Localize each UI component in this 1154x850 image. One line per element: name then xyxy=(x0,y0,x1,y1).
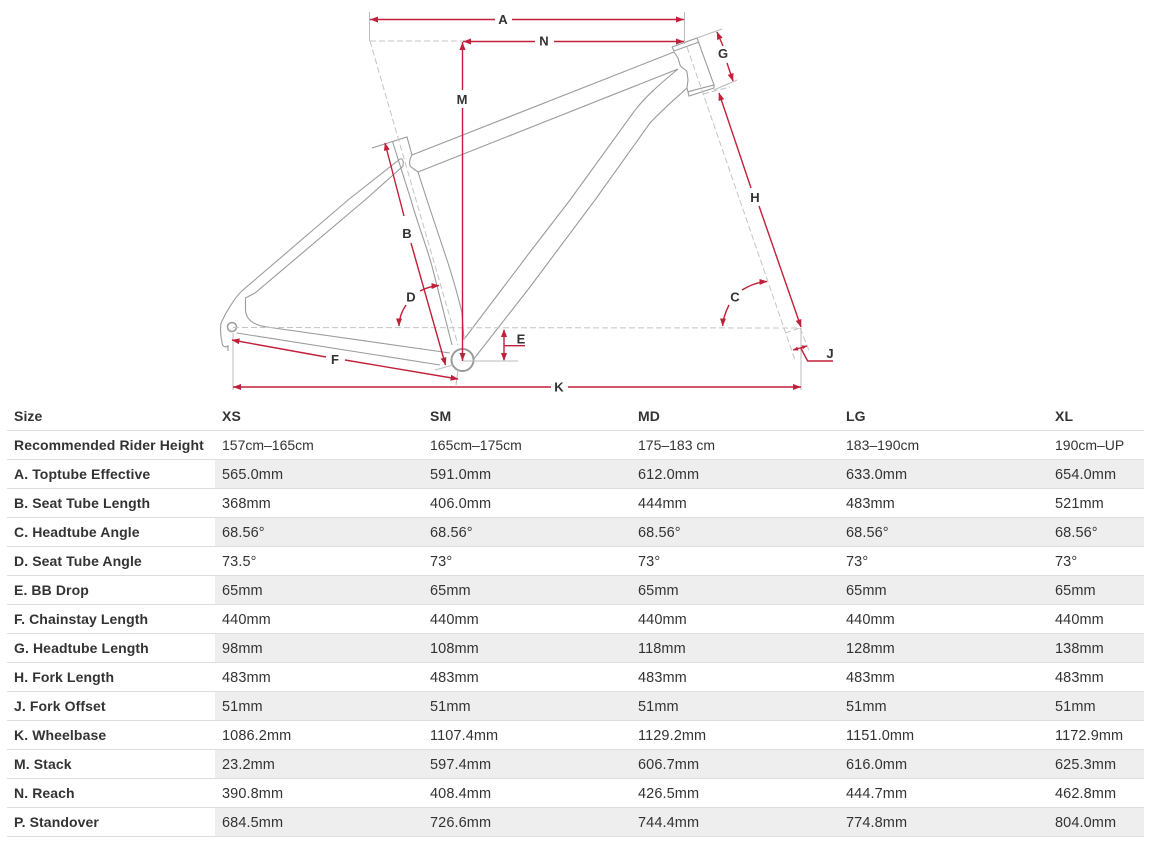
row: headtube length: G. Headtube Length xyxy=(14,640,149,656)
row: wheelbase: 1129.2mm xyxy=(638,728,706,744)
row: stack: 616.0mm xyxy=(846,757,907,773)
row: toptube: 633.0mm xyxy=(846,467,907,483)
row: chainstay: 440mm xyxy=(222,612,271,628)
row: stack: 606.7mm xyxy=(638,757,699,773)
dimension M: M xyxy=(457,92,467,107)
row: fork offset: 51mm xyxy=(1055,699,1096,715)
dimension N: N xyxy=(539,34,549,48)
row: stack: 625.3mm xyxy=(1055,757,1116,773)
frame outline xyxy=(221,38,714,371)
row: seat tube length: 406.0mm xyxy=(430,496,491,512)
row: headtube angle: C. Headtube Angle xyxy=(14,524,140,540)
row: standover: 774.8mm xyxy=(846,815,907,831)
row: reach xyxy=(7,785,1144,808)
row: fork length: 483mm xyxy=(1055,670,1104,686)
row: headtube angle: 68.56° xyxy=(846,525,889,541)
row: seat tube angle: 73° xyxy=(846,554,868,570)
row: fork offset: J. Fork Offset xyxy=(14,698,106,714)
row: chainstay: F. Chainstay Length xyxy=(14,611,148,627)
row: headtube angle: 68.56° xyxy=(222,525,265,541)
bottom bracket xyxy=(452,349,474,371)
dimension F xyxy=(232,340,458,379)
row: standover: 726.6mm xyxy=(430,815,491,831)
rear dropout xyxy=(228,322,236,332)
dimension A: A xyxy=(498,12,508,27)
row: fork offset: 51mm xyxy=(846,699,887,715)
row: standover: 744.4mm xyxy=(638,815,699,831)
row: BB drop: E. BB Drop xyxy=(14,582,89,598)
dimension E: E xyxy=(517,332,526,346)
row: BB drop: 65mm xyxy=(222,583,263,599)
dimension A xyxy=(370,12,684,27)
row: chainstay: 440mm xyxy=(430,612,479,628)
row: rider height: 190cm–UP xyxy=(1055,437,1124,453)
row: toptube: 612.0mm xyxy=(638,467,699,483)
bike frame geometry diagram xyxy=(220,12,834,394)
header row xyxy=(7,408,1144,431)
row: headtube angle: 68.56° xyxy=(638,525,681,541)
row: stack: 597.4mm xyxy=(430,757,491,773)
row: rider height: 183–190cm xyxy=(846,437,919,453)
header row: XL xyxy=(1055,408,1073,424)
row: stack xyxy=(7,750,1144,779)
header row: Size xyxy=(14,408,42,424)
row: fork offset xyxy=(7,692,1144,721)
row: stack: 23.2mm xyxy=(222,757,275,773)
dimension G xyxy=(717,32,733,81)
top tube xyxy=(410,52,678,172)
dimension E xyxy=(501,329,526,361)
dimension C xyxy=(723,282,767,326)
table body xyxy=(7,408,1144,837)
row: fork offset: 51mm xyxy=(430,699,471,715)
row: seat tube angle: 73.5° xyxy=(222,554,257,570)
row: reach: 426.5mm xyxy=(638,786,699,802)
dimension J: J xyxy=(826,346,834,361)
row: standover: P. Standover xyxy=(14,814,99,830)
dimension N xyxy=(463,34,684,48)
row: seat tube angle xyxy=(7,553,1144,576)
row: headtube length: 98mm xyxy=(222,641,263,657)
row: headtube length xyxy=(7,634,1144,663)
dimension C: C xyxy=(730,290,740,304)
dimension G: G xyxy=(718,46,728,61)
row: reach: 462.8mm xyxy=(1055,786,1116,802)
row: stack: M. Stack xyxy=(14,756,72,772)
dimension K: K xyxy=(554,380,564,394)
row: fork length: 483mm xyxy=(846,670,895,686)
dimension M xyxy=(457,42,467,361)
row: BB drop xyxy=(7,576,1144,605)
row: fork length: 483mm xyxy=(222,670,271,686)
row: wheelbase xyxy=(7,727,1144,750)
header row: SM xyxy=(430,408,451,424)
row: toptube: A. Toptube Effective xyxy=(14,466,150,482)
header row: XS xyxy=(222,408,241,424)
row: wheelbase: 1107.4mm xyxy=(430,728,498,744)
row: fork length: 483mm xyxy=(638,670,687,686)
row: BB drop: 65mm xyxy=(846,583,887,599)
row: headtube angle xyxy=(7,518,1144,547)
row: headtube length: 118mm xyxy=(638,641,686,657)
row: standover: 804.0mm xyxy=(1055,815,1116,831)
row: BB drop: 65mm xyxy=(638,583,679,599)
row: seat tube length: 444mm xyxy=(638,496,687,512)
dimension K xyxy=(233,380,801,394)
row: headtube length: 138mm xyxy=(1055,641,1104,657)
row: headtube angle: 68.56° xyxy=(430,525,473,541)
header row: LG xyxy=(846,408,866,424)
row: reach: N. Reach xyxy=(14,785,75,801)
row: standover: 684.5mm xyxy=(222,815,283,831)
row: wheelbase: 1086.2mm xyxy=(222,728,291,744)
row: rider height xyxy=(7,437,1144,460)
row: rider height: 157cm–165cm xyxy=(222,437,314,453)
row: headtube angle: 68.56° xyxy=(1055,525,1098,541)
dimension H: H xyxy=(750,190,760,205)
row: chainstay: 440mm xyxy=(638,612,687,628)
row: fork offset: 51mm xyxy=(222,699,263,715)
row: rider height: 175–183 cm xyxy=(638,437,715,453)
row: fork length: H. Fork Length xyxy=(14,669,114,685)
row: seat tube angle: 73° xyxy=(638,554,660,570)
row: toptube: 565.0mm xyxy=(222,467,283,483)
row: seat tube length: B. Seat Tube Length xyxy=(14,495,150,511)
row: seat tube angle: 73° xyxy=(1055,554,1077,570)
row: chainstay: 440mm xyxy=(1055,612,1104,628)
row: seat tube angle: D. Seat Tube Angle xyxy=(14,553,142,569)
row: wheelbase: K. Wheelbase xyxy=(14,727,106,743)
row: wheelbase: 1172.9mm xyxy=(1055,728,1123,744)
chainstay xyxy=(237,327,450,365)
row: wheelbase: 1151.0mm xyxy=(846,728,914,744)
row: headtube length: 108mm xyxy=(430,641,479,657)
down tube xyxy=(465,69,687,360)
row: seat tube length: 483mm xyxy=(846,496,895,512)
row: seat tube length xyxy=(7,495,1144,518)
dimension J xyxy=(793,346,834,361)
dimension F: F xyxy=(331,352,339,367)
row: rider height: Recommended Rider Height xyxy=(14,437,204,453)
row: toptube: 654.0mm xyxy=(1055,467,1116,483)
row: seat tube angle: 73° xyxy=(430,554,452,570)
dimension D: D xyxy=(406,290,416,304)
geometry size table xyxy=(7,408,1144,837)
row: fork length: 483mm xyxy=(430,670,479,686)
dimension B: B xyxy=(402,226,412,241)
row: seat tube length: 521mm xyxy=(1055,496,1104,512)
row: chainstay xyxy=(7,611,1144,634)
row: reach: 408.4mm xyxy=(430,786,491,802)
dimension H xyxy=(719,93,801,327)
row: toptube: 591.0mm xyxy=(430,467,491,483)
row: BB drop: 65mm xyxy=(1055,583,1096,599)
row: headtube length: 128mm xyxy=(846,641,895,657)
extension lines xyxy=(233,12,801,390)
dashed construction lines xyxy=(233,41,810,360)
head tube xyxy=(672,38,714,96)
header row: MD xyxy=(638,408,660,424)
row: reach: 444.7mm xyxy=(846,786,907,802)
row: BB drop: 65mm xyxy=(430,583,471,599)
seat stay xyxy=(221,159,403,351)
row: fork length xyxy=(7,669,1144,692)
row: reach: 390.8mm xyxy=(222,786,283,802)
row: standover xyxy=(7,808,1144,837)
row: chainstay: 440mm xyxy=(846,612,895,628)
dimension B xyxy=(385,143,446,365)
seat tube and collar xyxy=(372,137,464,345)
row: fork offset: 51mm xyxy=(638,699,679,715)
dimension D xyxy=(399,286,439,326)
row: rider height: 165cm–175cm xyxy=(430,437,522,453)
row: seat tube length: 368mm xyxy=(222,496,271,512)
row: toptube xyxy=(7,460,1144,489)
